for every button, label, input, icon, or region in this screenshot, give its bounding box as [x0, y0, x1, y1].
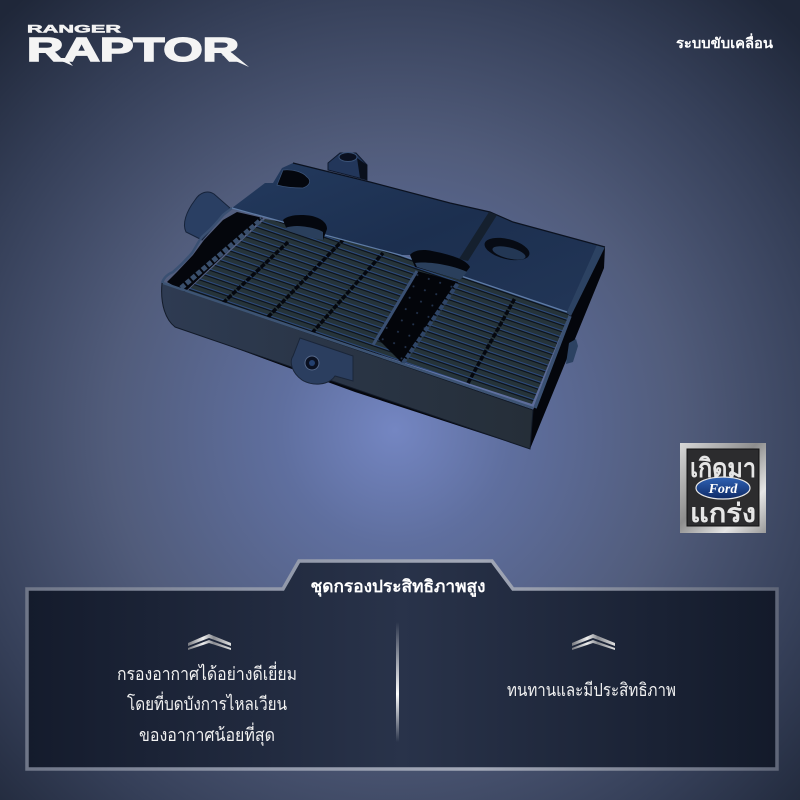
- toothed left band: [181, 219, 262, 288]
- pin section edge: [373, 271, 417, 345]
- left text block: [117, 661, 297, 746]
- front rim: [163, 283, 533, 408]
- logo: Ranger Raptor: [27, 24, 249, 68]
- left text block: ของอากาศน้อยที่สุด: [139, 722, 275, 746]
- panel frame: [27, 561, 777, 769]
- cover rear outline: [293, 163, 605, 247]
- pin section right rib: [403, 283, 458, 363]
- rear notch: [277, 170, 310, 188]
- fin floor: [186, 219, 570, 404]
- dark pin section: [377, 271, 458, 364]
- oval hole: [482, 234, 532, 264]
- front left notch ledge: [285, 226, 323, 240]
- center divider: [396, 622, 399, 742]
- badge inner: [687, 449, 759, 526]
- left rim: [162, 208, 232, 283]
- panel: features: [27, 561, 777, 769]
- logo claws: [55, 53, 249, 67]
- cover groove: [459, 212, 497, 261]
- left text block: กรองอากาศได้อย่างดีเยี่ยม: [117, 661, 297, 684]
- right rim: [535, 316, 570, 408]
- rear mounting tab: [328, 152, 367, 180]
- front right notch ledge: [415, 263, 467, 280]
- bottom shadow: [173, 318, 532, 449]
- cover plate: [232, 163, 597, 312]
- logo word: RANGER: RANGER: [27, 24, 121, 36]
- panel heading: ชุดกรองประสิทธิภาพสูง: [310, 577, 486, 598]
- oval hole floor: [491, 244, 527, 262]
- fin dividers: [223, 240, 515, 383]
- front wall: [162, 283, 533, 449]
- badge bottom word: แกร่ง: [690, 498, 756, 528]
- front left notch: [283, 215, 327, 240]
- logo word: RAPTOR: RAPTOR: [27, 31, 239, 68]
- right side wall: [530, 247, 605, 449]
- icon: right chevrons: [572, 634, 615, 650]
- front right notch: [410, 250, 470, 280]
- left text block: โดยที่บดบังการไหลเวียน: [127, 691, 287, 714]
- Ford oval: Ford: [708, 482, 738, 497]
- right text block: ทนทานและมีประสิทธิภาพ: [507, 680, 676, 700]
- right side clip: [566, 339, 578, 364]
- icon: left chevrons: [188, 634, 231, 650]
- front mounting tab: [291, 338, 353, 384]
- filter unit illustration: [162, 152, 605, 449]
- badge top word: เกิดมา: [690, 453, 756, 483]
- inner left wall: [167, 212, 263, 292]
- mounting cylinder: [184, 192, 230, 240]
- cover front highlight: [232, 208, 567, 312]
- badge: born tough: [680, 443, 766, 533]
- section label: drivetrain: ระบบขับเคลื่อน: [676, 33, 773, 51]
- badge frame: [680, 443, 766, 533]
- cover rim right: [565, 245, 605, 316]
